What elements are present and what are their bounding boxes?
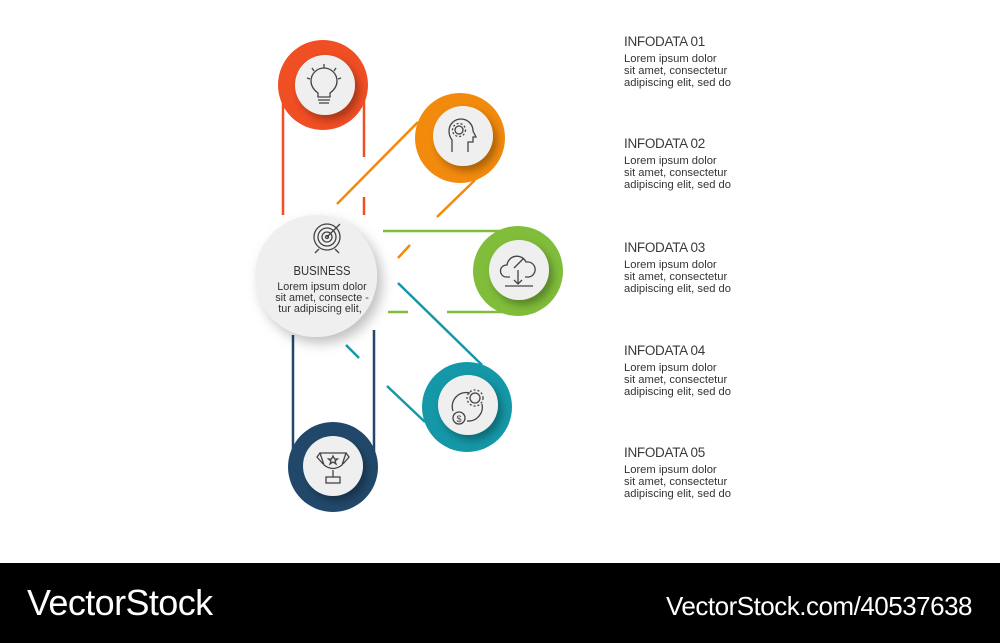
diagram	[254, 40, 563, 512]
footer logo: VectorStock	[27, 582, 212, 623]
footer bar	[0, 563, 1000, 643]
text block 01: INFODATA 01	[624, 34, 705, 49]
text block 01: Lorem ipsum dolor	[624, 53, 717, 65]
central business circle: Lorem ipsum dolor	[277, 281, 367, 293]
text block 04: Lorem ipsum dolor	[624, 362, 717, 374]
central business circle: sit amet, consecte -	[275, 292, 369, 304]
text block 03: sit amet, consectetur	[624, 271, 727, 283]
text block 01: sit amet, consectetur	[624, 65, 727, 77]
text block 02: sit amet, consectetur	[624, 167, 727, 179]
text block 02	[624, 136, 731, 191]
text block 04: INFODATA 04	[624, 343, 705, 358]
central business circle: tur adipiscing elit,	[278, 303, 362, 315]
text block 05: Lorem ipsum dolor	[624, 464, 717, 476]
connector lines	[283, 85, 510, 455]
text block 03: adipiscing elit, sed do	[624, 283, 731, 295]
text block 04: sit amet, consectetur	[624, 374, 727, 386]
circle 5 navy: trophy	[288, 422, 378, 512]
text block 05: adipiscing elit, sed do	[624, 488, 731, 500]
circle 1 red: idea	[278, 40, 368, 130]
text block 04	[624, 343, 731, 398]
text block 04: adipiscing elit, sed do	[624, 386, 731, 398]
circle 2 orange: head gear	[415, 93, 505, 183]
text block 03: INFODATA 03	[624, 240, 705, 255]
text block 05: INFODATA 05	[624, 445, 705, 460]
text block 02: adipiscing elit, sed do	[624, 179, 731, 191]
circle 4 teal: money cycle: $	[456, 414, 462, 424]
text block 02: INFODATA 02	[624, 136, 705, 151]
text block 05: sit amet, consectetur	[624, 476, 727, 488]
central business circle: BUSINESS	[294, 264, 350, 278]
circle 3 green: cloud	[473, 226, 563, 316]
circle 4 teal: money cycle	[422, 362, 512, 452]
text block 02: Lorem ipsum dolor	[624, 155, 717, 167]
text block 01	[624, 34, 731, 89]
footer url: VectorStock.com/40537638	[666, 591, 972, 621]
text block 05	[624, 445, 731, 500]
central business circle	[255, 215, 377, 337]
text block 03: Lorem ipsum dolor	[624, 259, 717, 271]
text block 01: adipiscing elit, sed do	[624, 77, 731, 89]
text block 03	[624, 240, 731, 295]
